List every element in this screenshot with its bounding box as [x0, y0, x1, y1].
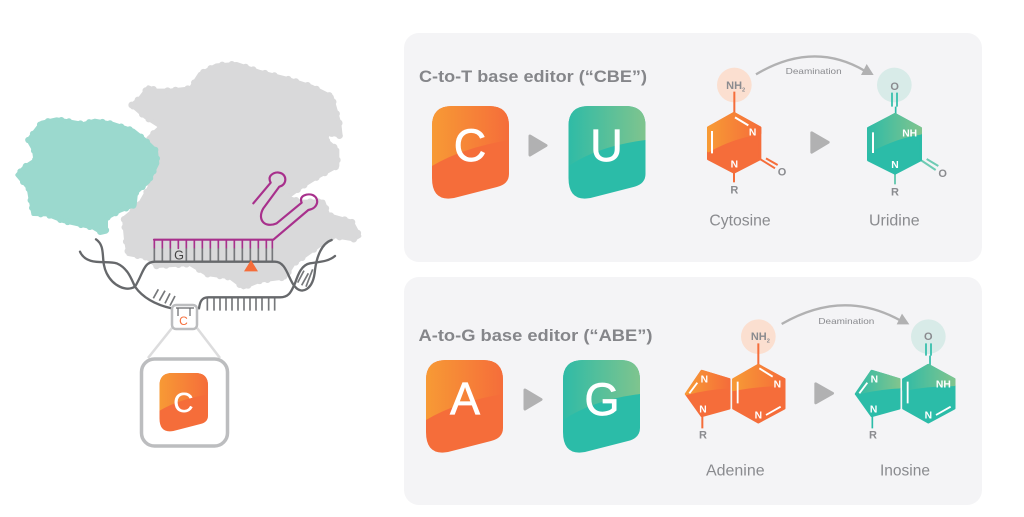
label: uridine: Uridine [869, 213, 920, 230]
cytosine molecule: 2 [742, 87, 745, 93]
uridine molecule: O [890, 81, 899, 93]
cytosine molecule: N [731, 159, 738, 170]
adenine molecule: 2 [767, 338, 770, 344]
label: inosine: Inosine [880, 463, 930, 480]
ABE chemistry [686, 305, 954, 480]
uridine molecule: R [891, 186, 899, 198]
badge: C: C [454, 120, 486, 171]
cytosine molecule [708, 68, 787, 197]
badge: A [426, 360, 503, 453]
badge: C [432, 106, 509, 199]
inosine molecule [856, 319, 954, 442]
adenine molecule: N [699, 404, 707, 415]
protein: gray Cas9 [124, 64, 359, 287]
panel: C-to-T base editor [404, 33, 982, 262]
heading: CBE: C-to-T base editor (“CBE”) [419, 68, 647, 86]
zoom connector lines [148, 328, 220, 358]
panel: A-to-G base editor [404, 277, 982, 505]
deamination arrow: Deamination [786, 66, 842, 76]
guide RNA [154, 172, 317, 248]
small target box with C [172, 305, 197, 329]
inosine molecule: NH [936, 379, 951, 390]
cytosine molecule: R [730, 185, 738, 197]
adenine molecule: N [701, 375, 708, 386]
label: adenine: Adenine [706, 463, 765, 480]
inosine molecule: N [871, 375, 878, 386]
base G label: G [174, 249, 184, 263]
adenine molecule: N [755, 410, 762, 421]
magnified box with C badge: C [173, 387, 193, 418]
badge: G [563, 360, 640, 453]
badge: U: U [590, 120, 623, 171]
adenine molecule [686, 319, 784, 442]
uridine molecule: O [938, 168, 947, 180]
magnified box with C badge [142, 359, 228, 446]
arrow: C to U [530, 136, 546, 155]
CBE chemistry [708, 56, 947, 230]
inosine molecule: N [870, 404, 877, 415]
heading: ABE: A-to-G base editor (“ABE”) [418, 327, 652, 345]
cytosine molecule: NH [726, 80, 742, 92]
inosine molecule: R [869, 430, 877, 442]
adenine molecule: NH [751, 331, 767, 343]
uridine molecule: N [891, 160, 899, 171]
deamination arrow [756, 56, 874, 76]
R-loop DNA and guide RNA diagram [80, 172, 335, 311]
DNA rungs [153, 248, 313, 311]
deamination arrow: Deamination [818, 316, 875, 326]
inosine molecule: O [924, 331, 933, 343]
badge: G: G [584, 374, 620, 425]
badge: A: A [450, 373, 480, 424]
arrow: A to G [525, 390, 541, 409]
deamination arrow [782, 305, 909, 326]
adenine molecule: R [699, 430, 707, 442]
label: cytosine: Cytosine [709, 213, 771, 230]
small target box with C: C [179, 314, 188, 328]
uridine molecule: NH [902, 129, 917, 140]
inosine molecule: N [925, 410, 932, 421]
DNA strands [80, 239, 335, 308]
arrow: cytosine to uridine [812, 133, 828, 152]
protein: teal deaminase [17, 119, 157, 233]
adenine molecule: N [774, 379, 781, 390]
arrow: adenine to inosine [816, 384, 833, 403]
cytosine molecule: O [778, 167, 787, 179]
cytosine molecule: N [749, 128, 756, 139]
badge: U [568, 106, 646, 199]
uridine molecule [868, 68, 947, 198]
cut site triangle [244, 260, 258, 271]
